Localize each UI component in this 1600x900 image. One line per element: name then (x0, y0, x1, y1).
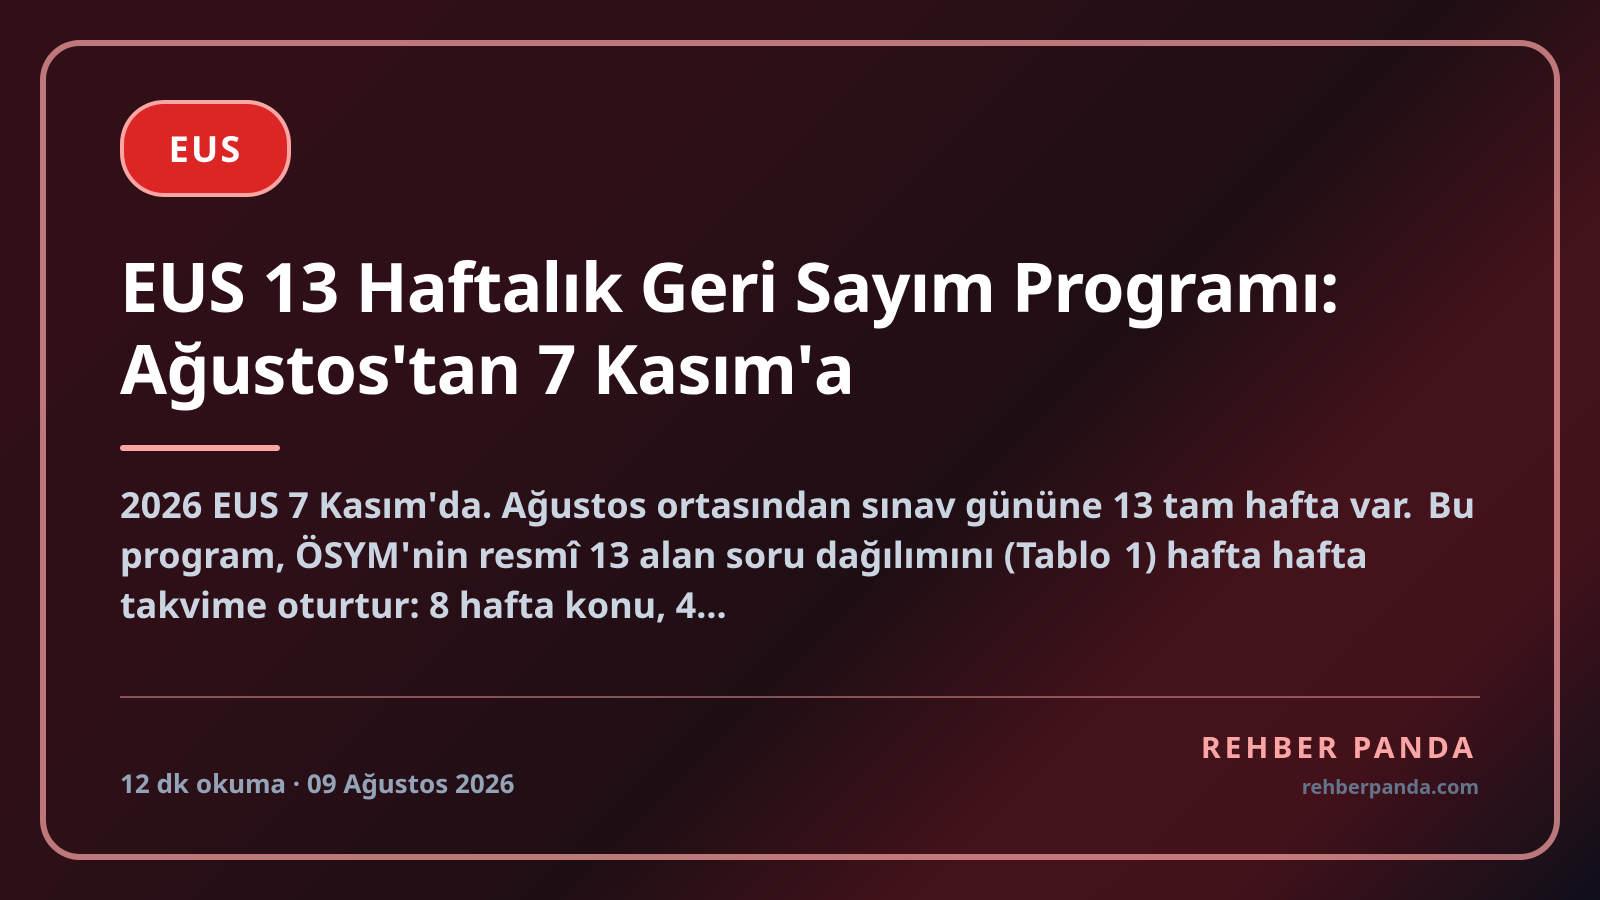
description text: takvime oturtur: 8 hafta konu, 4... (120, 580, 727, 629)
title: EUS 13 Haftalık Geri Sayım Programı: (120, 239, 1339, 332)
accent rule (120, 445, 280, 451)
brand url: rehberpanda.com (1302, 773, 1479, 800)
brand name: REHBER PANDA (1201, 726, 1477, 767)
description text: program, ÖSYM'nin resmî 13 alan soru dağılımını (Tablo 1) hafta hafta (120, 530, 1368, 579)
description text: 2026 EUS 7 Kasım'da. Ağustos ortasından sınav gününe 13 tam hafta var. Bu (120, 480, 1475, 529)
badge: EUS (120, 100, 291, 197)
description text (120, 480, 1475, 629)
badge: EUS: EUS (169, 124, 242, 173)
footer divider (120, 696, 1480, 698)
title: Ağustos'tan 7 Kasım'a (120, 321, 854, 414)
title (120, 239, 1339, 414)
reading time and date: 12 dk okuma · 09 Ağustos 2026 (120, 765, 515, 801)
